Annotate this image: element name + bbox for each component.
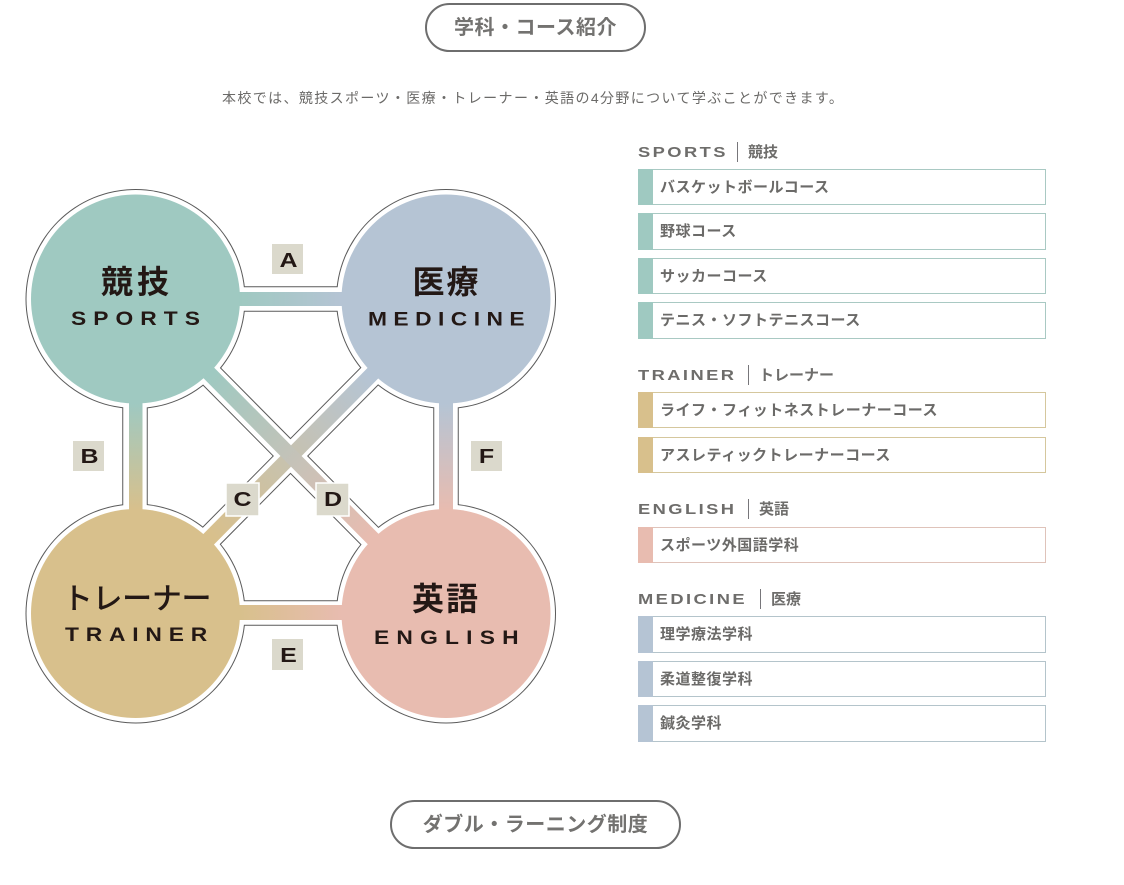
course: basketball (638, 169, 1046, 205)
label A: A (279, 249, 298, 271)
circle: sports: 競技 (101, 264, 173, 300)
section header: sports (638, 142, 778, 162)
course: athletic trainer (638, 437, 1046, 473)
circle: english (342, 509, 550, 718)
course: physical therapy (638, 616, 1046, 653)
label D (316, 483, 349, 516)
section header: medicine: 医療 (771, 591, 801, 608)
section header: english (638, 499, 789, 519)
course: judo therapy: 柔道整復学科 (660, 671, 753, 688)
course: physical therapy: 理学療法学科 (660, 626, 753, 643)
circle: trainer (31, 509, 240, 718)
section header: medicine: MEDICINE (638, 591, 747, 608)
connector F (439, 395, 453, 520)
course: athletic trainer: アスレティックトレーナーコース (660, 447, 891, 464)
circle: trainer: トレーナー (63, 583, 211, 616)
label C (226, 483, 259, 516)
connector C diagonal (200, 366, 380, 548)
course: baseball: 野球コース (660, 223, 737, 240)
connector E (230, 605, 350, 620)
connector B (129, 395, 142, 520)
section header: sports: 競技 (748, 144, 778, 161)
section header: trainer: TRAINER (638, 367, 736, 384)
intro text: 本校では、競技スポーツ・医療・トレーナー・英語の4分野について学ぶことができます。 (222, 90, 844, 106)
section header: english: ENGLISH (638, 501, 736, 518)
course: sports foreign language (638, 527, 1046, 563)
label B: B (80, 445, 99, 467)
course: soccer: サッカーコース (660, 268, 768, 285)
circle: english: ENGLISH (374, 628, 519, 649)
connector D diagonal (200, 364, 382, 548)
course: judo therapy (638, 661, 1046, 697)
heading: course introduction: 学科・コース紹介 (454, 17, 617, 39)
heading: double learning: ダブル・ラーニング制度 (423, 814, 648, 836)
label F: F (479, 445, 494, 467)
section header: trainer: トレーナー (759, 367, 834, 384)
section header: medicine (638, 589, 801, 609)
label C: C (233, 488, 252, 510)
circle: sports: SPORTS (71, 309, 200, 330)
label A (272, 244, 303, 274)
label B (73, 441, 104, 471)
course: life fitness trainer (638, 392, 1046, 428)
course: tennis: テニス・ソフトテニスコース (660, 312, 861, 329)
course: tennis (638, 302, 1046, 339)
section header: sports: SPORTS (638, 144, 728, 161)
label E: E (280, 644, 297, 666)
circle: medicine (342, 194, 550, 404)
label D: D (324, 488, 342, 510)
course: acupuncture (638, 705, 1046, 742)
course: life fitness trainer: ライフ・フィットネストレーナーコース (660, 402, 938, 419)
circle: medicine: MEDICINE (368, 309, 525, 330)
course: sports foreign language: スポーツ外国語学科 (660, 537, 799, 554)
circle: english: 英語 (412, 581, 480, 617)
heading: double learning (390, 800, 681, 849)
connector A (230, 292, 350, 306)
circle: trainer: TRAINER (65, 625, 207, 646)
course: baseball (638, 213, 1046, 250)
course: soccer (638, 258, 1046, 294)
heading: course introduction (425, 3, 646, 52)
label E (272, 639, 303, 670)
circle: sports (31, 194, 240, 404)
section header: trainer (638, 365, 834, 385)
section header: english: 英語 (759, 501, 789, 518)
circle: medicine: 医療 (412, 264, 481, 300)
course: acupuncture: 鍼灸学科 (660, 715, 722, 732)
label F (471, 441, 502, 471)
course: basketball: バスケットボールコース (660, 179, 829, 196)
diagram: four fields connected (26, 189, 556, 724)
